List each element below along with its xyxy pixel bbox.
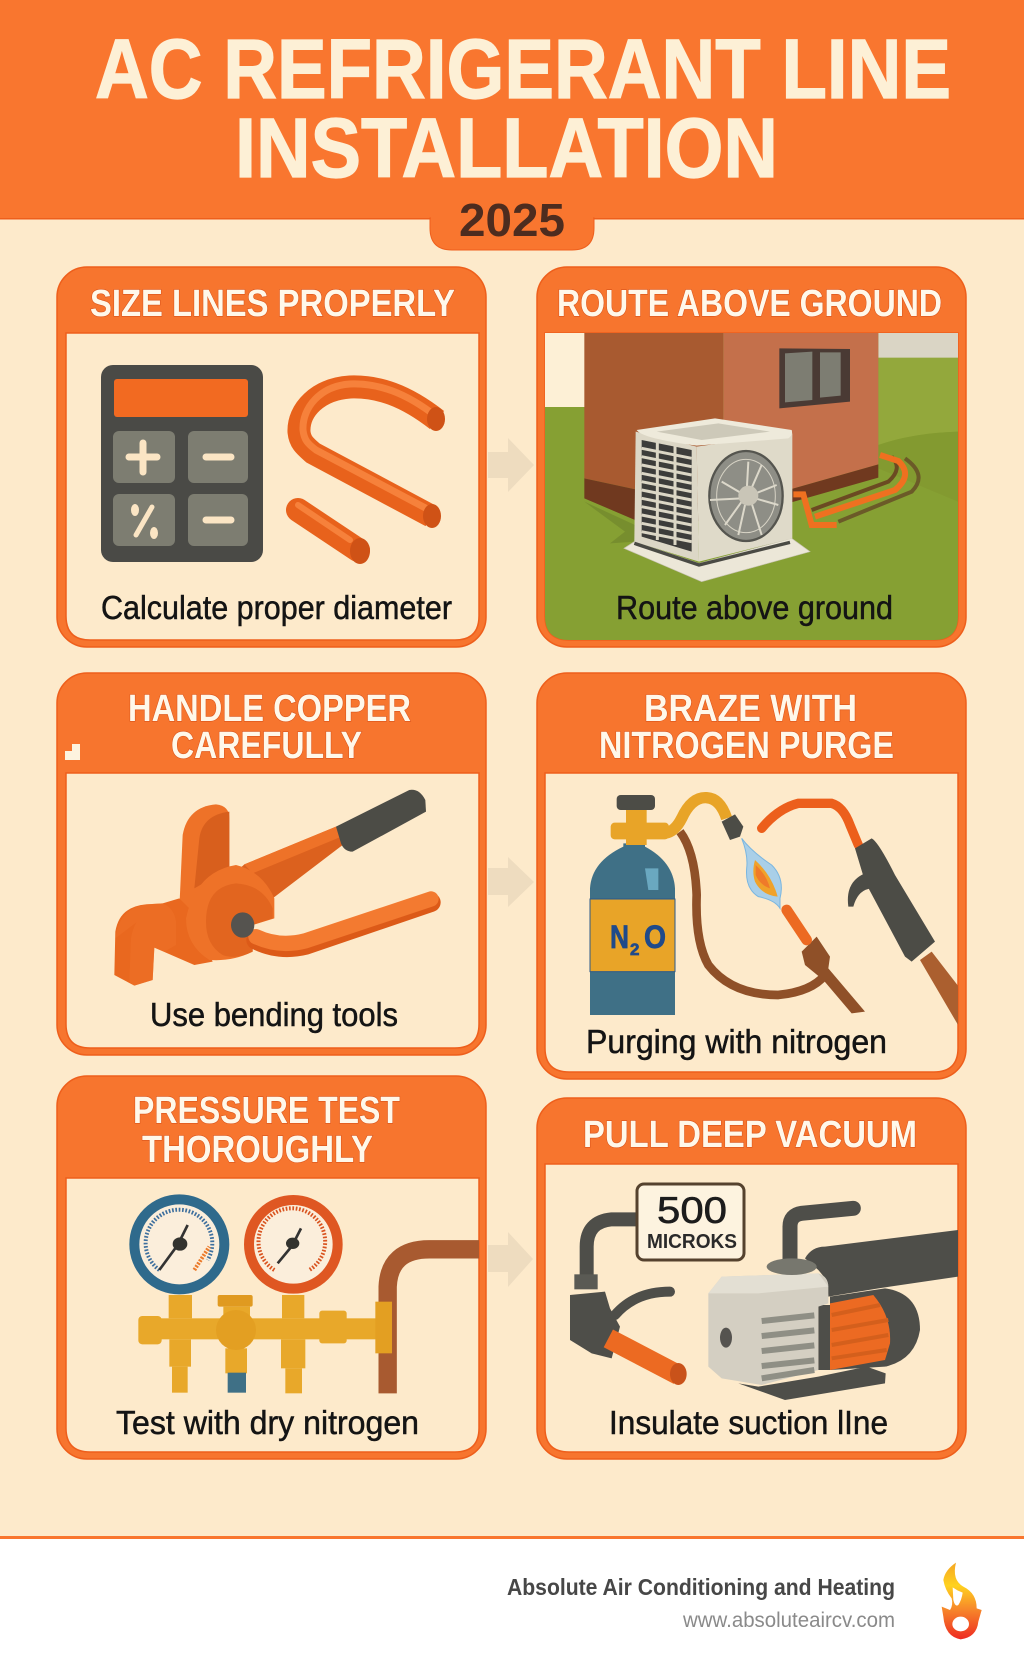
panel: handle copper carefully: [57, 673, 486, 1055]
heading: SIZE LINES PROPERLY: [90, 283, 455, 325]
illustration: house with outdoor unit: [545, 333, 958, 640]
bottle label: [610, 919, 666, 959]
corner mark: [65, 744, 80, 760]
panel: braze with nitrogen purge: [537, 673, 966, 1079]
panel: pull deep vacuum: [537, 1098, 966, 1459]
arrow: step 5 to 6: [488, 1232, 533, 1287]
icon: copper pipes: [298, 384, 445, 564]
panel: size lines properly: [57, 267, 486, 647]
caption: Test with dry nitrogen: [116, 1404, 419, 1441]
icon: calculator: [101, 365, 263, 562]
heading line 1: HANDLE COPPER: [128, 688, 411, 730]
heading line 2: THOROUGHLY: [142, 1129, 373, 1171]
heading: ROUTE ABOVE GROUND: [557, 283, 942, 325]
illustration: nitrogen bottle and torch: [590, 795, 960, 1028]
caption: Use bending tools: [150, 996, 398, 1033]
arrow: step 1 to 2: [488, 438, 534, 492]
illustration: manifold gauges: [134, 1199, 479, 1393]
footer: [0, 1536, 1024, 1666]
header banner: [0, 0, 1024, 250]
gauge readout: MICROKS: [647, 1231, 737, 1253]
caption: Calculate proper diameter: [101, 589, 452, 626]
heading line 2: CAREFULLY: [171, 725, 362, 767]
caption: Purging with nitrogen: [586, 1023, 887, 1060]
heading line 1: PRESSURE TEST: [133, 1090, 400, 1132]
title line 2: INSTALLATION: [235, 101, 778, 195]
bottle label: N: [610, 919, 629, 955]
panel: pressure test thoroughly: [57, 1076, 486, 1459]
illustration: vacuum pump: [570, 1208, 958, 1400]
icon: red gauge: [249, 1200, 338, 1289]
heading line 2: NITROGEN PURGE: [599, 725, 894, 767]
website: www.absoluteaircv.com: [682, 1609, 895, 1632]
caption: Route above ground: [616, 589, 893, 626]
company name: Absolute Air Conditioning and Heating: [507, 1574, 895, 1600]
icon: flame logo: [942, 1563, 982, 1639]
gauge readout: 500: [657, 1190, 727, 1231]
heading: PULL DEEP VACUUM: [583, 1114, 917, 1156]
icon: blue gauge: [134, 1199, 224, 1289]
heading line 1: BRAZE WITH: [644, 688, 857, 730]
bottle label: 2: [630, 940, 639, 959]
bottle label: O: [644, 919, 666, 955]
caption: Insulate suction lIne: [609, 1404, 888, 1441]
year tab: [430, 194, 594, 250]
arrow: step 3 to 4: [488, 857, 534, 907]
icon: tube bender: [114, 790, 431, 986]
year tab: 2025: [459, 194, 565, 246]
panel: route above ground: [537, 267, 966, 647]
gauge readout: [637, 1184, 744, 1260]
